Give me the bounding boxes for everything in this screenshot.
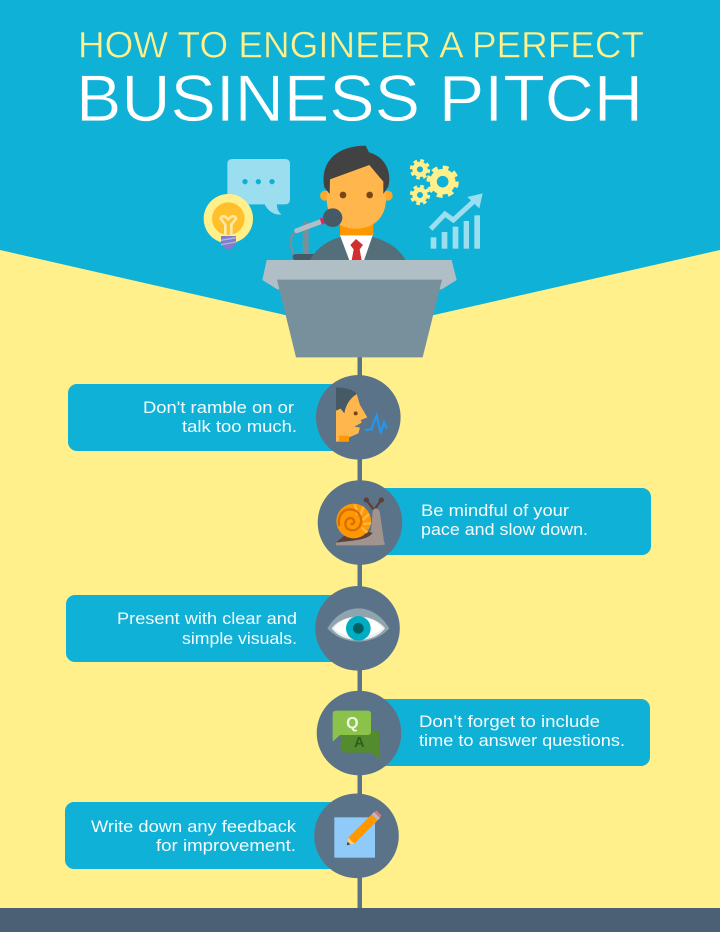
icon: eye: [327, 608, 389, 642]
icon: notepad and pencil: [334, 811, 381, 858]
illustration: speaker at podium: [204, 146, 483, 357]
text: feedback: Write down any feedback: [91, 818, 297, 836]
text: answer questions: Don’t forget to include: [419, 713, 600, 731]
step 5 badge: notepad and pencil: [314, 794, 399, 878]
icon: Q and A bubbles: A: [354, 735, 365, 751]
text: mindful pace: Be mindful of your: [421, 502, 570, 520]
microphone: [291, 218, 325, 260]
icon: Q and A bubbles: [333, 711, 379, 759]
text: don't ramble: talk too much.: [182, 418, 297, 436]
blue header band: [0, 0, 720, 315]
title line 1: HOW TO ENGINEER A PERFECT: [78, 24, 644, 66]
step 4 badge: Q and A: [317, 691, 401, 775]
icon: Q and A bubbles: Q: [346, 715, 359, 732]
step 1 badge: talking head: [316, 375, 401, 460]
text: clear visuals: simple visuals.: [182, 630, 297, 648]
step 2 badge: snail: [318, 480, 402, 565]
title line 2: BUSINESS PITCH: [76, 61, 643, 135]
text: mindful pace: [421, 502, 588, 539]
panel: clear visuals: [66, 595, 351, 662]
step 3 badge: eye: [315, 586, 400, 671]
footer bar: [0, 908, 720, 932]
icon: talking head: [336, 387, 387, 442]
icon: snail: [336, 497, 385, 545]
vertical timeline line: [358, 355, 362, 910]
panel: answer questions: [365, 699, 650, 766]
icon: growth chart: [431, 193, 483, 249]
title: [76, 24, 644, 135]
text: don't ramble: Don't ramble on or: [143, 399, 295, 417]
text: feedback: [91, 818, 297, 855]
icon: speech bubble: [227, 159, 290, 215]
presenter: [310, 146, 406, 260]
panel: feedback: [65, 802, 350, 869]
text: answer questions: [419, 713, 625, 750]
icon: light bulb: [204, 194, 253, 249]
text: feedback: for improvement.: [156, 837, 296, 855]
text: mindful pace: pace and slow down.: [421, 521, 588, 539]
podium: [262, 260, 457, 357]
text: answer questions: time to answer questions.: [419, 732, 625, 750]
icon: gears: [412, 161, 456, 203]
text: don't ramble: [143, 399, 297, 436]
panel: don't ramble: [68, 384, 353, 451]
text: clear visuals: [117, 610, 297, 648]
panel: mindful pace: [366, 488, 651, 555]
text: clear visuals: Present with clear and: [117, 610, 297, 628]
